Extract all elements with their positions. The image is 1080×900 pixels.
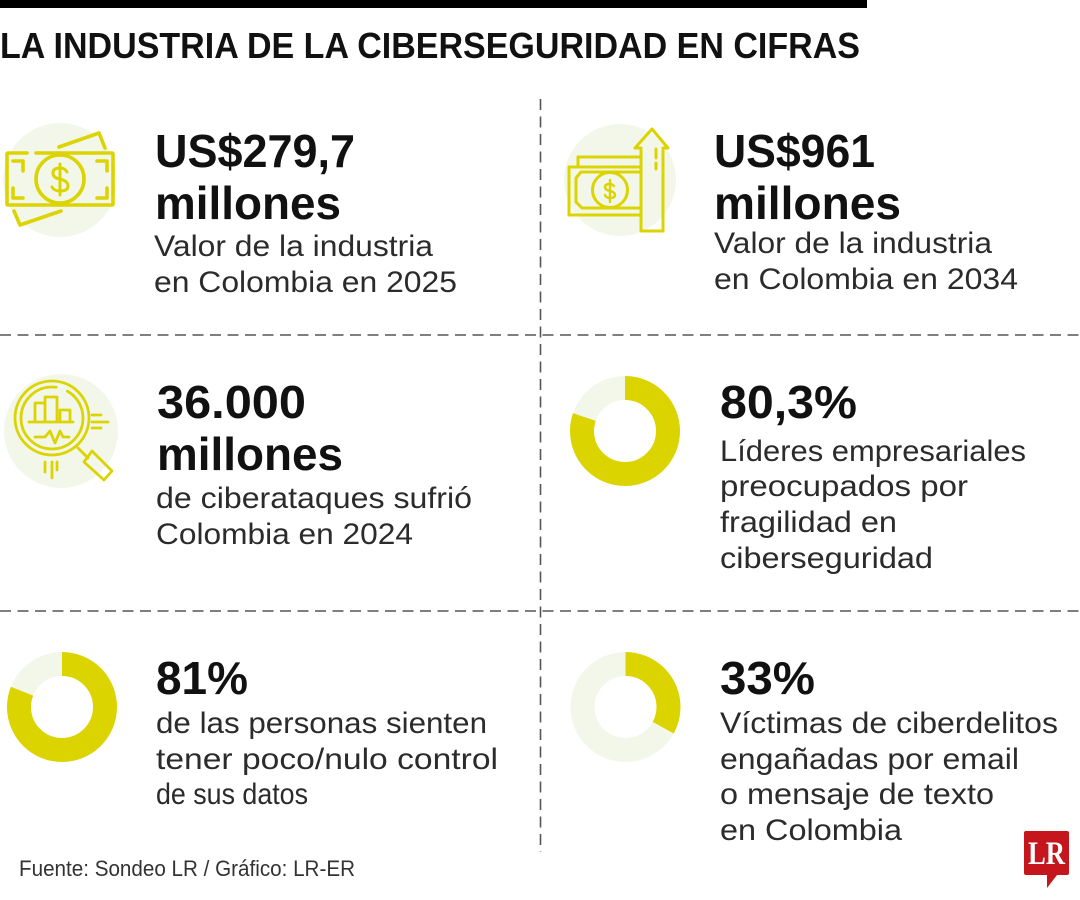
description: Valor de la industria <box>714 227 992 260</box>
top bar <box>0 0 867 8</box>
panel: control de datos <box>19 652 498 811</box>
icon: banknotes with up arrow <box>564 124 676 236</box>
panel: valor 2034: millones <box>714 177 901 229</box>
value: 80,3% <box>720 376 857 428</box>
description: fragilidad en <box>720 506 897 539</box>
description: en Colombia <box>720 814 902 847</box>
description: de ciberataques sufrió <box>156 482 472 515</box>
value: US$279,7 <box>155 125 355 177</box>
icon: banknotes <box>3 123 117 237</box>
description <box>720 707 1058 847</box>
description <box>714 227 1018 296</box>
description: o mensaje de texto <box>720 778 994 811</box>
description: Colombia en 2024 <box>156 518 413 551</box>
icon: magnifying glass with chart <box>4 374 118 488</box>
panel: valor 2025: millones <box>155 177 341 229</box>
donut chart: 33% <box>582 664 668 750</box>
description <box>156 707 498 811</box>
description: de las personas sienten <box>156 707 487 740</box>
value: 33% <box>720 652 815 704</box>
description: Víctimas de ciberdelitos <box>720 707 1058 740</box>
panel: ciberataques <box>4 374 472 551</box>
description <box>154 230 457 299</box>
donut chart: 80,3% <box>582 388 668 474</box>
panel: valor 2034 <box>564 124 1018 296</box>
description: Líderes empresariales <box>720 435 1026 468</box>
description: de sus datos <box>156 778 308 811</box>
description <box>720 435 1026 575</box>
description: Valor de la industria <box>154 230 433 263</box>
donut chart: 81% <box>19 664 105 750</box>
description: en Colombia en 2025 <box>154 266 457 299</box>
description: tener poco/nulo control <box>156 743 498 776</box>
description <box>156 482 472 551</box>
value: 36.000 <box>157 376 306 428</box>
title: LA INDUSTRIA DE LA CIBERSEGURIDAD EN CIFRAS <box>0 25 860 66</box>
panel: valor 2025 <box>3 123 457 299</box>
description: engañadas por email <box>720 743 1019 776</box>
panel: líderes empresariales <box>582 376 1026 575</box>
logo: LR <box>1024 831 1069 888</box>
panel: víctimas de ciberdelitos <box>582 652 1058 847</box>
description: en Colombia en 2034 <box>714 263 1018 296</box>
source note: Fuente: Sondeo LR / Gráfico: LR-ER <box>19 856 355 881</box>
value: 81% <box>156 652 248 704</box>
description: preocupados por <box>720 470 968 503</box>
logo: LR: LR <box>1028 836 1066 872</box>
value: US$961 <box>714 125 875 177</box>
description: ciberseguridad <box>720 542 933 575</box>
panel: ciberataques: millones <box>157 428 343 480</box>
